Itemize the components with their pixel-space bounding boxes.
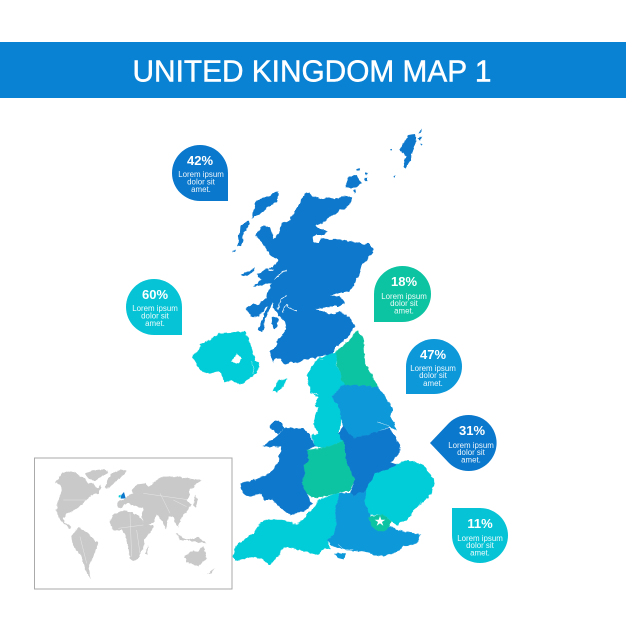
callout: 60%: dolor sit [141,312,170,320]
callout: 18% [374,266,431,322]
map: Scotland and islands [232,128,422,365]
callout: 60%: amet. [145,319,165,328]
region: Isle of Wight [335,553,346,559]
callout: 47% [406,339,462,394]
map: England, Wales and Northern Ireland regions [192,330,434,565]
callout: 47%: Lorem ipsum [410,364,456,373]
title banner [0,42,626,98]
region: London [368,515,392,532]
region: East of England [365,460,434,525]
callout: 11%: 11% [467,516,493,531]
callout: 11%: dolor sit [466,541,495,550]
region: Isle of Man [273,378,287,392]
callout: 11% [452,508,508,563]
title: UNITED KINGDOM MAP 1 [132,54,492,88]
callout: 31%: Lorem ipsum [448,441,494,450]
callout: 47%: amet. [423,379,443,388]
callout: 42% [172,145,228,201]
inset: world map [34,458,232,589]
region: Yorkshire [332,385,397,438]
callout: 18%: dolor sit [390,299,419,308]
callout: 11%: Lorem ipsum [457,534,503,543]
callout: 60%: 60% [142,287,168,302]
callout: 42%: Lorem ipsum [178,170,224,179]
region: North East [336,330,378,387]
region: West Midlands [301,442,355,498]
callout: 31%: 31% [459,423,485,438]
callout: 18%: 18% [391,274,417,289]
callout: 60% [126,279,182,335]
icon: capital star [375,516,385,526]
region: Northern Ireland [192,332,259,385]
callout: 18%: amet. [394,306,414,316]
region: Anglesey [269,421,285,434]
callout: 42%: amet. [191,185,211,194]
callout: 42%: 42% [187,153,213,168]
callout: 31%: dolor sit [457,448,486,457]
region: South East [327,490,421,557]
region: East Midlands [339,427,400,497]
callout: 11%: amet. [470,548,490,558]
region: North West [307,352,343,448]
callout: 60%: Lorem ipsum [132,304,178,313]
callout: 47%: dolor sit [419,371,448,380]
callout: 42%: dolor sit [187,178,216,186]
callout: 31% [430,415,497,471]
region: Wales [240,428,315,515]
callout: 47%: 47% [420,347,446,362]
callout: 31%: amet. [461,456,481,464]
callout: 18%: Lorem ipsum [381,292,427,301]
region: South West [233,493,341,565]
